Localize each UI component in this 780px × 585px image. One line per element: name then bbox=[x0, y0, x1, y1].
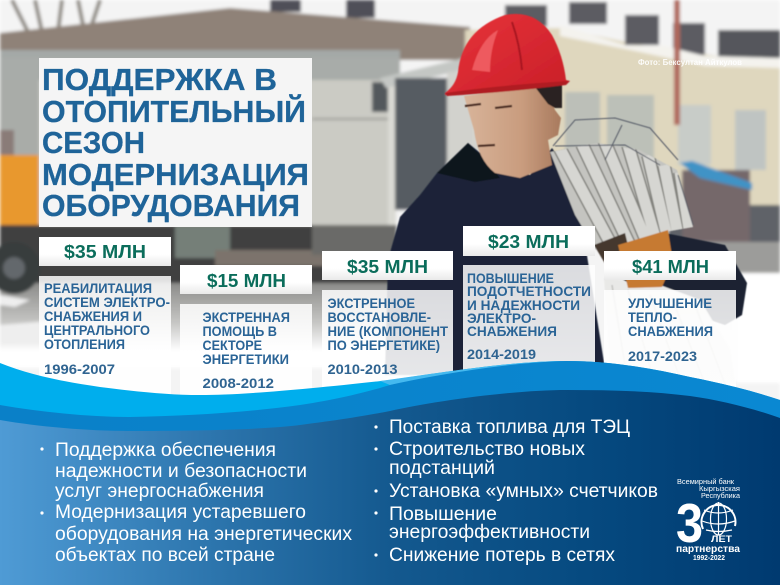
card 4: 2014-2019: 2014-2019 bbox=[467, 347, 536, 362]
hard hat bbox=[445, 14, 570, 96]
logo: World Bank Kyrgyz Republic 30 years of partnership: 1992-2022 bbox=[693, 555, 725, 562]
worker with hard hat and cable coil bbox=[385, 14, 747, 384]
wave banner bbox=[0, 361, 780, 585]
title text: ОБОРУДОВАНИЯ bbox=[42, 188, 300, 223]
bullet list: right column: Строительство новых bbox=[389, 439, 586, 460]
card 2: 2008-2012: СЕКТОРЕ bbox=[202, 338, 262, 353]
card 2: 2008-2012: $15 МЛН bbox=[207, 271, 286, 291]
title panel bbox=[39, 58, 312, 227]
card 1: 1996-2007: РЕАБИЛИТАЦИЯ bbox=[44, 281, 152, 296]
card 5: 2017-2023: УЛУЧШЕНИЕ bbox=[628, 296, 712, 311]
card 4: 2014-2019 bbox=[463, 226, 595, 375]
card 1: 1996-2007: $35 МЛН bbox=[64, 242, 146, 262]
card 3: 2010-2013: НИЕ (КОМПОНЕНТ bbox=[328, 324, 449, 339]
card 4: 2014-2019: ЭЛЕКТРО- bbox=[467, 311, 536, 326]
card 4: 2014-2019: $23 МЛН bbox=[488, 232, 569, 252]
card 1: 1996-2007: ОТОПЛЕНИЯ bbox=[44, 337, 125, 352]
logo: World Bank Kyrgyz Republic 30 years of partnership: Республика bbox=[701, 491, 741, 500]
card 3: 2010-2013: ЭКСТРЕННОЕ bbox=[328, 296, 415, 311]
bullet list: right column: подстанций bbox=[389, 458, 495, 479]
binding wire bbox=[553, 118, 693, 225]
title text: ОТОПИТЕЛЬНЫЙ bbox=[42, 93, 306, 129]
logo: World Bank Kyrgyz Republic 30 years of partnership: партнерства bbox=[676, 544, 740, 555]
bullet list: left column: услуг энергоснабжения bbox=[55, 481, 264, 502]
card 3: 2010-2013: ВОССТАНОВЛЕ- bbox=[328, 310, 431, 325]
card 2: 2008-2012: 2008-2012 bbox=[202, 376, 274, 391]
jacket bbox=[385, 143, 606, 375]
card 5: 2017-2023 bbox=[604, 251, 736, 390]
card 2: 2008-2012 bbox=[180, 265, 312, 404]
logo: World Bank Kyrgyz Republic 30 years of partnership: ЛЕТ bbox=[711, 534, 733, 544]
card 4: 2014-2019: ПОДОТЧЕТНОСТИ bbox=[467, 284, 591, 299]
logo: World Bank Kyrgyz Republic 30 years of partnership: 3 bbox=[676, 492, 703, 554]
logo: World Bank Kyrgyz Republic 30 years of partnership: Всемирный банк bbox=[677, 477, 735, 486]
card 3: 2010-2013: $35 МЛН bbox=[347, 257, 428, 277]
card 5: 2017-2023: $41 МЛН bbox=[632, 257, 709, 277]
icon: globe bbox=[701, 502, 735, 535]
card 1: 1996-2007: ЦЕНТРАЛЬНОГО bbox=[44, 323, 150, 338]
title text: МОДЕРНИЗАЦИЯ bbox=[42, 157, 309, 192]
card 5: 2017-2023: СНАБЖЕНИЯ bbox=[628, 324, 713, 339]
bullet list: right column: Снижение потерь в сетях bbox=[389, 545, 616, 566]
card 3: 2010-2013: ПО ЭНЕРГЕТИКЕ) bbox=[328, 338, 440, 353]
card 3: 2010-2013 bbox=[322, 251, 453, 390]
bullet list: left column: надежности и безопасности bbox=[55, 461, 307, 482]
upper cable coil bbox=[550, 142, 694, 250]
bullet list: left column: Модернизация устаревшего bbox=[55, 502, 306, 523]
bullet list: right column: энергоэффективности bbox=[389, 522, 590, 543]
jacket collar bbox=[437, 143, 500, 182]
lower cable coil bbox=[604, 278, 736, 384]
photo credit: Фото: Бексултан Айткулов bbox=[638, 58, 742, 67]
hair bbox=[535, 84, 562, 108]
card 1: 1996-2007: 1996-2007 bbox=[44, 362, 115, 377]
bullet list: left column bbox=[40, 440, 353, 566]
bullet list: right column: Установка «умных» счетчиков bbox=[389, 481, 658, 502]
bullet list: right column: Поставка топлива для ТЭЦ bbox=[389, 417, 630, 438]
card 3: 2010-2013: 2010-2013 bbox=[328, 362, 398, 377]
right sleeve bbox=[650, 232, 747, 325]
title text: СЕЗОН bbox=[42, 125, 145, 160]
glove bbox=[594, 230, 673, 288]
bullet list: left column: Поддержка обеспечения bbox=[55, 440, 276, 461]
logo: World Bank Kyrgyz Republic 30 years of partnership bbox=[676, 477, 741, 562]
card 5: 2017-2023: ТЕПЛО- bbox=[628, 310, 677, 325]
card 4: 2014-2019: СНАБЖЕНИЯ bbox=[467, 324, 557, 339]
title text bbox=[42, 62, 309, 223]
card 1: 1996-2007 bbox=[39, 237, 171, 396]
bullet list: right column bbox=[374, 417, 658, 566]
eyes and mouth bbox=[465, 104, 512, 146]
card 2: 2008-2012: ЭНЕРГЕТИКИ bbox=[202, 352, 289, 367]
logo: World Bank Kyrgyz Republic 30 years of partnership: Кыргызская bbox=[699, 484, 740, 493]
neck and face bbox=[464, 86, 561, 178]
card 4: 2014-2019: И НАДЕЖНОСТИ bbox=[467, 298, 580, 313]
bullet list: left column: объектах по всей стране bbox=[55, 545, 275, 566]
bullet list: left column: оборудования на энергетических bbox=[55, 524, 353, 545]
bullet list: right column: Повышение bbox=[389, 504, 497, 525]
card 4: 2014-2019: ПОВЫШЕНИЕ bbox=[467, 271, 554, 286]
card 2: 2008-2012: ЭКСТРЕННАЯ bbox=[202, 310, 290, 325]
card 1: 1996-2007: СИСТЕМ ЭЛЕКТРО- bbox=[44, 295, 170, 310]
card 2: 2008-2012: ПОМОЩЬ В bbox=[202, 324, 277, 339]
title text: ПОДДЕРЖКА В bbox=[42, 62, 277, 97]
card 1: 1996-2007: СНАБЖЕНИЯ И bbox=[44, 309, 142, 324]
card 5: 2017-2023: 2017-2023 bbox=[628, 349, 698, 364]
